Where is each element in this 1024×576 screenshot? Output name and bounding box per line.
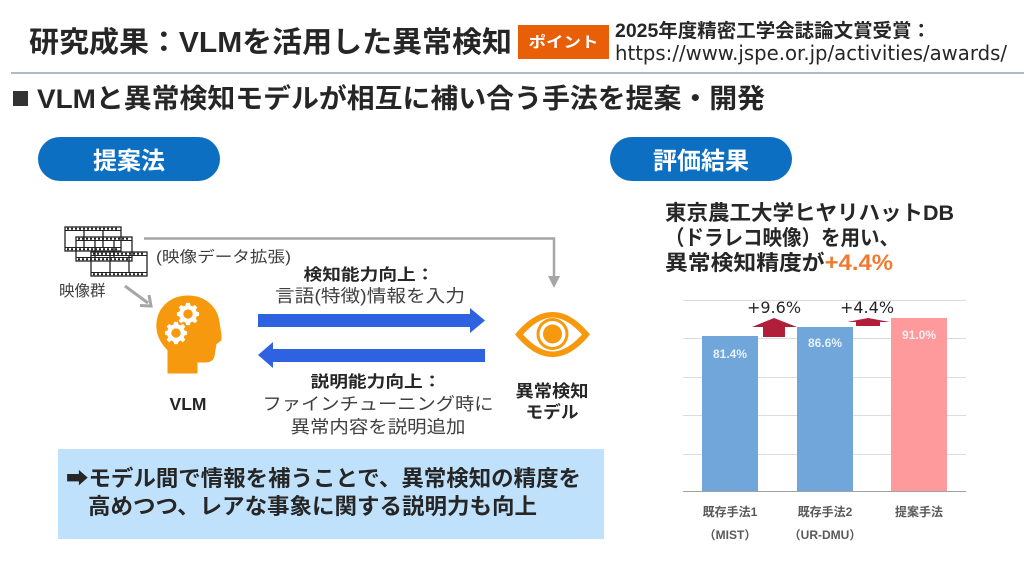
bar: proposed: 91.0%: [902, 328, 936, 342]
bar: UR-DMU: [797, 327, 853, 491]
award note: https://www.jspe.or.jp/activities/awards/: [615, 41, 1007, 65]
panel: proposed method: [38, 137, 604, 539]
subheading: VLMと異常検知モデルが相互に補い合う手法を提案・開発: [37, 83, 765, 114]
arrow: +9.6%: +9.6%: [747, 298, 801, 317]
text: explanation improvement: 異常内容を説明追加: [290, 417, 466, 437]
arrow: +9.6%: [747, 298, 801, 337]
callout: ➡モデル間で情報を補うことで、異常検知の精度を: [66, 466, 581, 491]
award note: [615, 19, 1007, 65]
result summary text: （ドラレコ映像）を用い、: [665, 227, 899, 250]
arrow: VLM to model: [258, 308, 485, 333]
arrow: +4.4%: +4.4%: [840, 298, 894, 317]
text: detection improvement: 検知能力向上：: [304, 265, 434, 284]
axis labels: [703, 504, 943, 542]
title: 研究成果：VLMを活用した異常検知: [29, 26, 512, 59]
panel: evaluation results: [610, 137, 966, 542]
label: 映像群: 映像群: [59, 282, 106, 300]
bar chart: [683, 298, 966, 542]
text: explanation improvement: [262, 372, 494, 437]
text: detection improvement: 言語(特徴)情報を入力: [275, 286, 465, 306]
arrow: film to anomaly model: [144, 238, 560, 288]
pill heading: 評価結果: 評価結果: [653, 148, 749, 175]
axis labels: （UR-DMU）: [789, 528, 861, 542]
badge: ポイント: ポイント: [528, 34, 598, 51]
bar: MIST: 81.4%: [713, 347, 747, 361]
label: video data augmentation: (映像データ拡張): [156, 247, 291, 266]
axis labels: 既存手法1: [703, 504, 758, 519]
callout: [58, 449, 604, 539]
bar: proposed: [891, 318, 947, 491]
text: explanation improvement: ファインチューニング時に: [262, 394, 494, 414]
award note: 2025年度精密工学会誌論文賞受賞：: [615, 19, 931, 42]
icon: video group film strips: [65, 227, 147, 276]
axis labels: （MIST）: [704, 528, 756, 542]
axis labels: 既存手法2: [798, 504, 853, 519]
badge: ポイント: [518, 25, 609, 59]
callout: 高めつつ、レアな事象に関する説明力も向上: [88, 494, 537, 519]
pill heading: 提案法: [38, 137, 220, 181]
arrow: +4.4%: [840, 298, 894, 326]
text: detection improvement: [275, 265, 465, 306]
label: anomaly detection model: 異常検知: [516, 382, 588, 401]
icon: eye: [515, 312, 590, 357]
label: anomaly detection model: [516, 382, 588, 422]
label: VLM: VLM: [170, 394, 206, 414]
axis labels: 提案手法: [895, 504, 943, 519]
icon: VLM head with gears: [157, 296, 221, 373]
text: explanation improvement: 説明能力向上：: [310, 372, 442, 391]
pill heading: 評価結果: [610, 137, 792, 181]
result summary text: 異常検知精度が +4.4%: [665, 250, 893, 275]
label: anomaly detection model: モデル: [526, 402, 578, 422]
bar: UR-DMU: 86.6%: [808, 336, 842, 350]
result summary text: [665, 202, 954, 275]
bar: MIST: [702, 336, 758, 491]
result summary text: 東京農工大学ヒヤリハットDB: [665, 202, 954, 225]
pill heading: 提案法: 提案法: [93, 148, 165, 175]
arrow: model to VLM: [258, 342, 485, 368]
arrow: film to VLM: [125, 286, 151, 306]
